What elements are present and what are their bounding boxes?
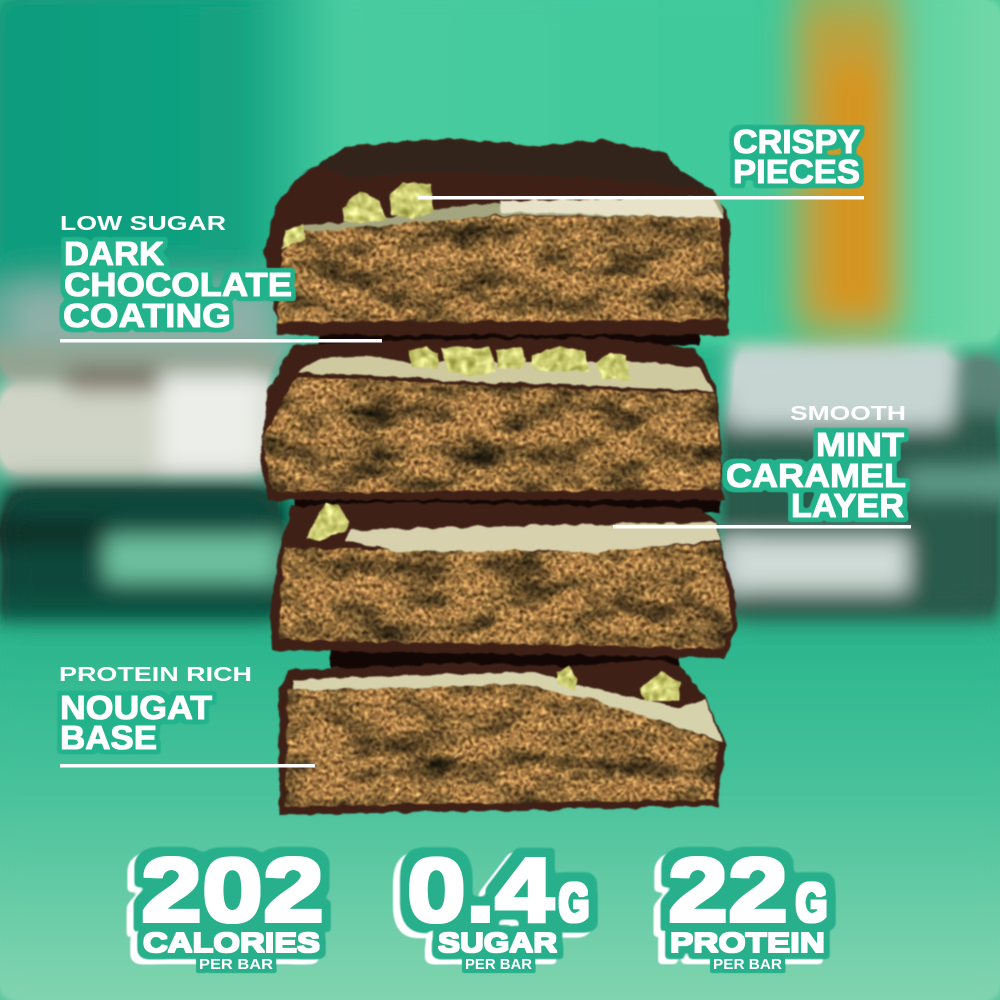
stat: 22g protein per bar: G [796, 873, 827, 933]
stat: 202 calories per bar: CALORIES [143, 927, 320, 958]
callout: mint caramel layer: SMOOTH [790, 403, 906, 425]
stat: 202 calories per bar: 202 [141, 841, 324, 941]
stat: 0.4g sugar per bar: SUGAR [438, 927, 557, 958]
stat: 0.4g sugar per bar [407, 841, 589, 973]
stat: 22g protein per bar: PROTEIN [670, 927, 825, 958]
callout: mint caramel layer: CARAMEL [726, 457, 906, 494]
bar stack photograph [260, 138, 737, 815]
stat: 22g protein per bar: 22 [668, 841, 788, 941]
callout: nougat base: PROTEIN RICH [59, 664, 252, 686]
stat: 202 calories per bar [141, 841, 324, 973]
callout: nougat base: BASE [60, 719, 157, 756]
callout: crispy pieces [418, 123, 864, 200]
bar 1 (top) [265, 138, 730, 335]
callout: dark chocolate coating: CHOCOLATE [64, 266, 292, 303]
callout: mint caramel layer: LAYER [791, 487, 904, 524]
callout: dark chocolate coating [60, 213, 382, 342]
stat: 22g protein per bar [668, 841, 827, 973]
stat: 22g protein per bar: PER BAR [713, 956, 782, 973]
callout: dark chocolate coating: COATING [63, 297, 231, 334]
callout: mint caramel layer [613, 403, 911, 528]
callout: nougat base: NOUGAT [60, 689, 212, 726]
callout: mint caramel layer: MINT [816, 426, 904, 463]
stat: 202 calories per bar: PER BAR [199, 956, 273, 973]
callout: dark chocolate coating: DARK [64, 235, 164, 272]
callout: nougat base [59, 664, 315, 768]
callout: dark chocolate coating: LOW SUGAR [60, 213, 227, 235]
callout: crispy pieces: CRISPY [733, 123, 860, 160]
bar 4 (bottom) [278, 660, 726, 815]
shadow between bars [295, 330, 720, 668]
stat: 0.4g sugar per bar: G [559, 873, 589, 933]
stat: 0.4g sugar per bar: 0.4 [407, 841, 554, 941]
stat: 0.4g sugar per bar: PER BAR [465, 956, 532, 973]
bar 2 [260, 338, 724, 500]
bar 3 [270, 502, 737, 658]
callout: crispy pieces: PIECES [733, 153, 860, 190]
